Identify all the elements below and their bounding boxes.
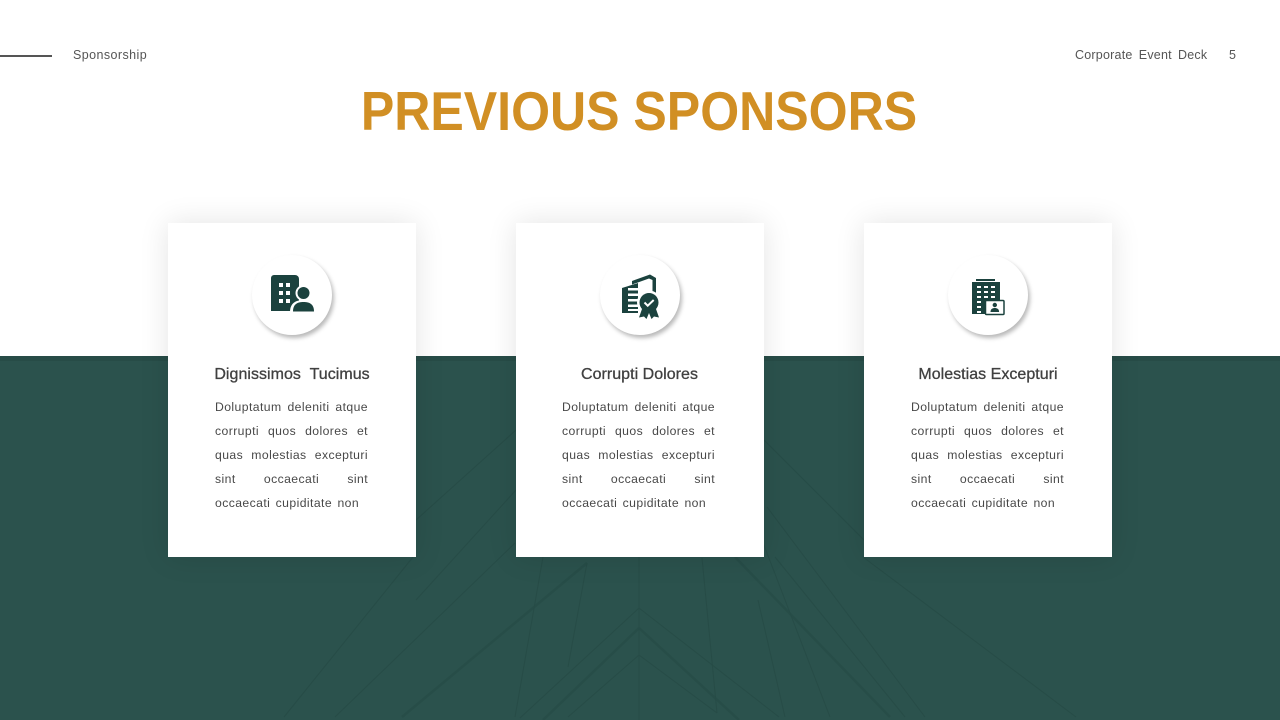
dark green background band with architectural lines [0, 356, 1280, 720]
card body text: sint occaecati sint [215, 472, 368, 486]
card body text [562, 400, 715, 510]
panel: Dignissimos Tucimus [168, 223, 416, 557]
deck name: Corporate Event Deck [1075, 48, 1207, 62]
card body text: corrupti quos dolores et [911, 424, 1064, 438]
icon: office building with ID card [948, 255, 1028, 335]
panel: Corrupti Dolores [516, 223, 764, 557]
card body text [215, 400, 368, 510]
card body text: Doluptatum deleniti atque [215, 400, 368, 414]
card body text: Doluptatum deleniti atque [562, 400, 715, 414]
card body text: Doluptatum deleniti atque [911, 400, 1064, 414]
card body text: quas molestias excepturi [562, 448, 715, 462]
panel: Molestias Excepturi [864, 223, 1112, 557]
card body text: sint occaecati sint [911, 472, 1064, 486]
card body text: quas molestias excepturi [911, 448, 1064, 462]
card body text: corrupti quos dolores et [215, 424, 368, 438]
section label: Sponsorship [73, 48, 147, 62]
card body text: occaecati cupiditate non [911, 496, 1055, 510]
icon: buildings with award ribbon [600, 255, 680, 335]
card body text: sint occaecati sint [562, 472, 715, 486]
card body text: corrupti quos dolores et [562, 424, 715, 438]
card body text: quas molestias excepturi [215, 448, 368, 462]
card heading: Corrupti Dolores [581, 366, 698, 383]
card body text: occaecati cupiditate non [562, 496, 706, 510]
title: PREVIOUS SPONSORS [361, 80, 917, 142]
page number: 5 [1229, 48, 1236, 62]
card heading: Molestias Excepturi [918, 366, 1058, 383]
header rule [0, 55, 52, 57]
card body text [911, 400, 1064, 510]
icon: building with person [252, 255, 332, 335]
card heading: Dignissimos Tucimus [214, 366, 370, 383]
card body text: occaecati cupiditate non [215, 496, 359, 510]
